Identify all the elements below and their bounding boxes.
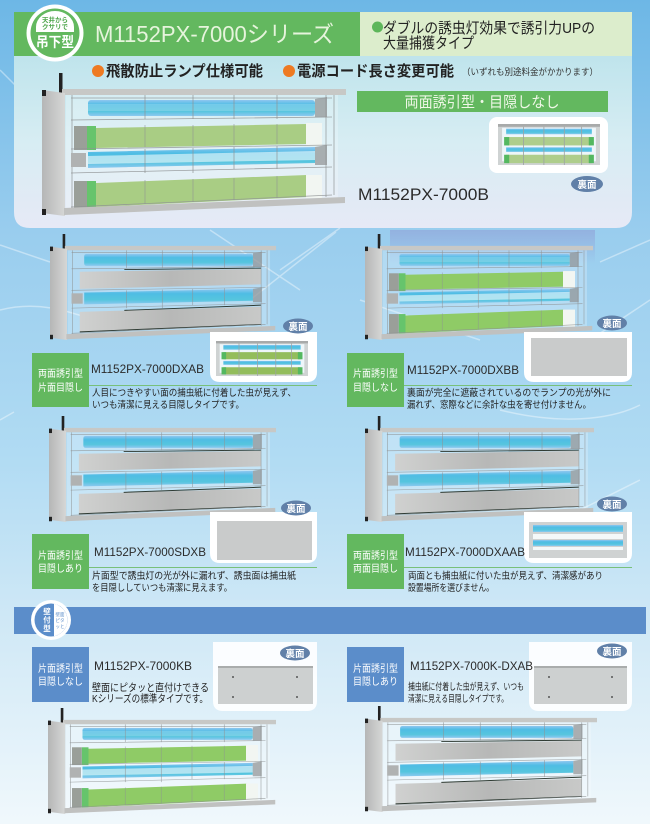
back label [597, 316, 627, 330]
back label [283, 318, 313, 334]
description: 両面とも捕虫紙に付いた虫が見えず、清潔感があり [408, 570, 603, 582]
description: 片面型で誘虫灯の光が外に漏れず、誘虫面は捕虫紙 [92, 570, 296, 582]
back label [597, 644, 627, 658]
product: M1152PX-7000DXAB [32, 234, 317, 411]
option notes: 電源コード長さ変更可能 [297, 62, 454, 80]
panel background [14, 56, 632, 228]
back plate [531, 338, 627, 376]
type label: 片面誘引型 [38, 662, 83, 675]
back view thumbnail [489, 117, 608, 173]
option notes [92, 62, 598, 80]
badge: wall-mounted type: 付 [43, 614, 51, 624]
product: M1152PX-7000DXAAB [347, 416, 632, 594]
type label [347, 353, 404, 407]
back view panel [524, 332, 632, 382]
model name: M1152PX-7000DXAB [91, 362, 204, 376]
back view panel [210, 332, 317, 382]
badge: hanging type [26, 4, 84, 62]
type label [32, 353, 89, 407]
type label: 目隠しあり [353, 676, 398, 688]
description: Kシリーズの標準タイプです。 [92, 692, 208, 705]
back label: 裏面 [288, 321, 308, 333]
back plate [218, 666, 313, 704]
feature box: ダブルの誘虫灯効果で誘引力UPの [383, 19, 595, 37]
badge: wall-mounted type: ッと [56, 624, 64, 629]
type label: 目隠しなし [38, 676, 83, 688]
badge: hanging type: 吊下型 [36, 34, 74, 50]
model name: M1152PX-7000KB [94, 659, 192, 673]
type label: 目隠しあり [38, 563, 83, 575]
type banner: 両面誘引型・目隠しなし [404, 94, 560, 111]
type label [347, 647, 404, 702]
option notes: （いずれも別途料金がかかります） [462, 66, 598, 77]
back label [281, 500, 311, 516]
back view panel [524, 512, 632, 563]
badge: wall-mounted type: ピタ [56, 617, 64, 624]
badge: hanging type: クサリで [42, 22, 68, 31]
model name: M1152PX-7000B [358, 185, 489, 204]
type label: 片面誘引型 [38, 549, 83, 562]
type label: 目隠しなし [353, 382, 398, 394]
back label: 裏面 [602, 499, 622, 511]
description: 裏面が完全に遮蔽されているのでランプの光が外に [407, 387, 611, 399]
product photo: M1152PX-7000B [42, 73, 346, 216]
badge: wall-mounted type: 壁面 [56, 611, 65, 618]
product photo [365, 234, 593, 340]
back label: 裏面 [286, 503, 306, 515]
back label: 裏面 [285, 648, 305, 660]
badge: wall-mounted type: 壁 [43, 606, 51, 616]
description: 捕虫紙に付着した虫が見えず、いつも [408, 681, 524, 693]
product photo [365, 416, 594, 522]
title bar [14, 12, 360, 56]
product photo [50, 234, 276, 340]
feature box: 大量捕獲タイプ [383, 35, 474, 52]
type banner [357, 91, 608, 112]
series title: M1152PX-7000シリーズ [95, 21, 334, 47]
description: いつも清潔に見える目隠しタイプです。 [92, 399, 244, 411]
back label [280, 646, 310, 660]
description: を目隠ししていつも清潔に見えます。 [92, 582, 232, 594]
back view panel [213, 642, 317, 711]
description [92, 387, 296, 411]
badge: wall-mounted type: 型 [43, 623, 51, 633]
description: 壁面にピタッと直付けできる [92, 681, 209, 694]
badge: hanging type: 天井から [42, 15, 68, 24]
product: M1152PX-7000KB [32, 642, 317, 814]
back label [597, 496, 627, 512]
type label [32, 647, 89, 702]
badge: wall-mounted type [31, 600, 71, 640]
description [408, 681, 524, 705]
feature box [360, 12, 632, 56]
product photo [49, 416, 276, 522]
product photo [365, 706, 597, 812]
description: 清潔に見える目隠しタイプです。 [408, 693, 508, 705]
type label: 両面誘引型 [353, 549, 398, 562]
description: 設置場所を選びません。 [408, 582, 494, 594]
product: M1152PX-7000DXBB [347, 234, 632, 411]
type label [347, 534, 404, 589]
model name: M1152PX-7000K-DXAB [410, 659, 533, 673]
back label: 裏面 [577, 179, 597, 191]
panel: hanging type series [14, 4, 632, 228]
description [407, 387, 611, 411]
type label [32, 534, 89, 589]
description: 人目につきやすい面の捕虫紙に付着した虫が見えず、 [92, 387, 296, 399]
back view thumbnail [529, 522, 627, 558]
description [92, 681, 209, 705]
back view panel [529, 642, 632, 711]
type label: 両面目隠し [353, 563, 398, 575]
product photo [48, 708, 276, 814]
back plate [534, 666, 627, 704]
back label: 裏面 [602, 318, 622, 330]
description: 漏れず、窓際などに余計な虫を寄せ付けません。 [407, 399, 591, 411]
back view thumbnail [216, 341, 308, 376]
product: M1152PX-7000K-DXAB [347, 642, 632, 812]
model name: M1152PX-7000DXBB [407, 363, 519, 377]
model name: M1152PX-7000DXAAB [405, 545, 525, 559]
type label: 片面目隠し [38, 381, 83, 394]
back label [571, 176, 603, 192]
product: M1152PX-7000SDXB [32, 416, 317, 594]
type label: 片面誘引型 [353, 367, 398, 380]
option notes: 飛散防止ランプ仕様可能 [106, 62, 263, 80]
back label: 裏面 [602, 646, 622, 658]
type label: 片面誘引型 [353, 662, 398, 675]
model name: M1152PX-7000SDXB [94, 545, 206, 559]
description [92, 570, 296, 594]
type label: 両面誘引型 [38, 367, 83, 380]
back view panel [210, 512, 317, 563]
back plate [217, 521, 312, 560]
description [408, 570, 603, 594]
section bar: wall-mounted type [14, 600, 646, 640]
